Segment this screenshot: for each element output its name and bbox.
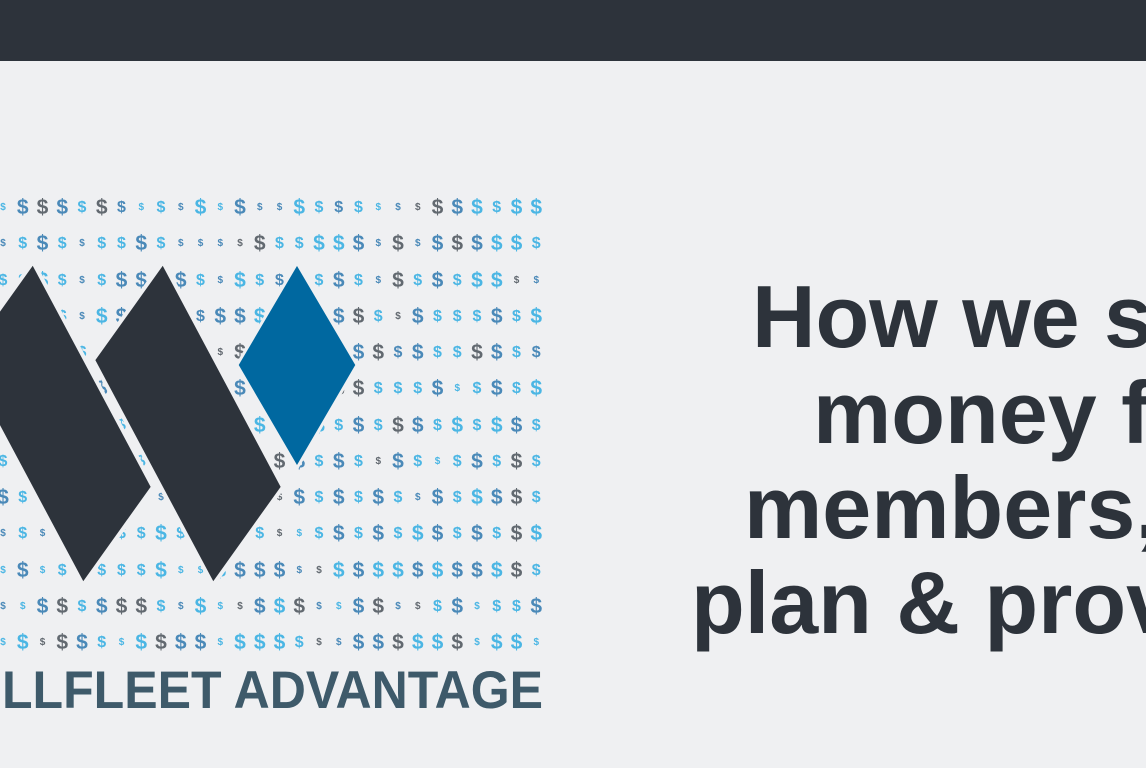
W mark: left dark parallelogram [0,262,153,585]
dollar sign pattern: $ $ $ $ $ $ $ $ $ $ $ $ $ $ $ $ $ $ $ $ $ $ $ $ $ $ $ $ [0,232,541,254]
dollar sign pattern: $ $ $ $ $ $ $ $ $ $ $ $ $ $ $ $ $ $ $ $ $ $ $ $ $ $ $ $ [0,414,541,436]
header bar [0,0,1146,61]
dollar sign pattern: $ $ $ $ $ $ $ $ $ $ $ $ $ $ $ $ $ $ $ $ $ $ $ $ $ $ $ $ [0,376,542,400]
W mark: right dark parallelogram [93,262,283,585]
blue diamond [237,263,357,468]
dollar sign pattern: $ $ $ $ $ $ $ $ $ $ $ $ $ $ $ $ $ $ $ $ $ $ $ $ $ $ $ $ [0,196,542,218]
dollar sign pattern: $ $ $ $ $ $ $ $ $ $ $ $ $ $ $ $ $ $ $ $ $ $ $ $ $ $ $ $ [0,450,541,472]
logo wordmark: LLFLEET ADVANTAGE [2,661,543,720]
dollar sign pattern: $ $ $ $ $ $ $ $ $ $ $ $ $ $ $ $ $ $ $ $ $ $ $ $ $ $ $ $ [0,268,539,292]
dollar sign pattern: $ $ $ $ $ $ $ $ $ $ $ $ $ $ $ $ $ $ $ $ $ $ $ $ $ $ $ $ [0,304,542,328]
dollar sign pattern: $ $ $ $ $ $ $ $ $ $ $ $ $ $ $ $ $ $ $ $ $ $ $ $ $ $ $ $ [0,558,541,582]
dollar sign pattern [0,196,542,654]
dollar sign pattern: $ $ $ $ $ $ $ $ $ $ $ $ $ $ $ $ $ $ $ $ $ $ $ $ $ $ $ $ [0,340,541,364]
dollar sign pattern: $ $ $ $ $ $ $ $ $ $ $ $ $ $ $ $ $ $ $ $ $ $ $ $ $ $ $ $ [0,630,539,654]
dollar sign pattern: $ $ $ $ $ $ $ $ $ $ $ $ $ $ $ $ $ $ $ $ $ $ $ $ $ $ $ $ [0,486,541,508]
dollar sign pattern: $ $ $ $ $ $ $ $ $ $ $ $ $ $ $ $ $ $ $ $ $ $ $ $ $ $ $ $ [0,522,542,544]
logo: dollar grid with W mark [0,196,543,720]
dollar sign pattern: $ $ $ $ $ $ $ $ $ $ $ $ $ $ $ $ $ $ $ $ $ $ $ $ $ $ $ $ [0,594,542,618]
